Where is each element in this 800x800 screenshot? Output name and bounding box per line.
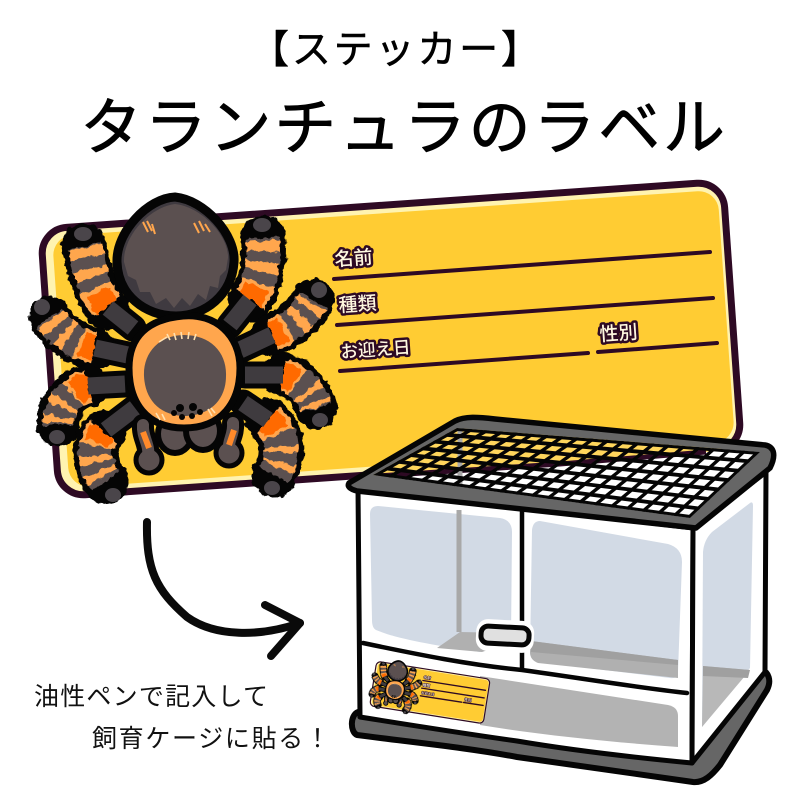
form fields [334, 246, 717, 371]
eyes [171, 403, 203, 420]
lid mesh [373, 428, 760, 518]
field: arrival date: お迎え日 [340, 337, 411, 362]
mini field labels: お迎え日 [421, 690, 435, 697]
field: sex: 性別 [599, 321, 638, 346]
lid frame [348, 417, 774, 528]
title: tarantula label: タランチュラのラベル [80, 94, 725, 163]
breeding cage [348, 417, 774, 782]
leg: right 2 [240, 282, 327, 350]
field: name: 名前 [334, 246, 373, 271]
pedipalps [136, 423, 242, 473]
field: sex [598, 321, 717, 352]
cephalothorax [129, 316, 240, 428]
field: species: 種類 [338, 292, 377, 317]
field: name [334, 246, 710, 279]
leg: left 3 [49, 384, 125, 444]
panel: sticker label [34, 181, 742, 502]
chelicerae [158, 412, 220, 453]
leg: right 4 [243, 403, 281, 495]
abdomen [117, 197, 234, 316]
field: arrival date [340, 337, 588, 371]
mini field labels [420, 674, 475, 706]
label card [40, 181, 742, 497]
cage base tray [352, 670, 769, 782]
leg: left 1 [74, 227, 133, 328]
legs [34, 218, 328, 502]
left glass [370, 506, 512, 652]
mini field labels: 性別 [464, 697, 472, 703]
field: species [337, 292, 713, 325]
leg: left 4 [95, 408, 135, 502]
door handle [475, 619, 535, 653]
right glass [530, 521, 682, 678]
door frame lines [363, 506, 687, 693]
instruction text: 油性ペンで記入して [34, 683, 268, 711]
mini field labels: 種類 [422, 682, 431, 688]
instruction text [34, 683, 330, 753]
leg: right 1 [230, 218, 271, 325]
cage body [358, 472, 766, 763]
mini sticker on cage [365, 653, 493, 732]
spider illustration [34, 197, 328, 502]
drawer grey panel [480, 676, 678, 747]
leg: left 2 [34, 299, 128, 355]
instruction text: 飼育ケージに貼る！ [92, 725, 330, 753]
leg: right 3 [245, 375, 328, 427]
title: sticker tag: 【ステッカー】 [250, 29, 540, 72]
arrow [147, 522, 300, 656]
side glass [702, 502, 753, 727]
mini field labels: 名前 [423, 674, 432, 681]
